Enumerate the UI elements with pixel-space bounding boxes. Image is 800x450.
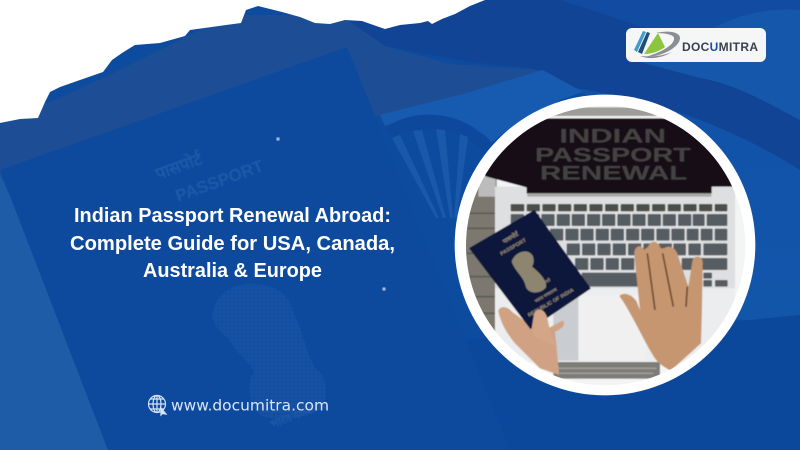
white circle frame bbox=[455, 95, 755, 395]
screen text: PASSPORT bbox=[535, 144, 691, 166]
title bbox=[70, 204, 395, 282]
keyboard bbox=[511, 204, 728, 287]
icon: globe bbox=[148, 396, 166, 415]
background: Ashoka wheel watermark bbox=[386, 115, 492, 218]
passport cover lettering (faint): भारत गणराज्य bbox=[269, 399, 329, 431]
left thumb bbox=[532, 309, 557, 347]
torn white paper edge bbox=[0, 0, 485, 123]
logo mark bbox=[634, 31, 680, 58]
website link bbox=[148, 396, 329, 415]
laptop screen bbox=[473, 118, 740, 197]
laptop body bbox=[495, 187, 748, 362]
handheld passport: PASSPORT bbox=[499, 237, 528, 257]
title: Australia & Europe bbox=[143, 259, 322, 282]
screen text: RENEWAL bbox=[540, 163, 687, 185]
passport cover background bbox=[0, 47, 510, 450]
title: Complete Guide for USA, Canada, bbox=[70, 232, 395, 255]
handheld passport: REPUBLIC OF INDIA bbox=[527, 287, 575, 319]
right hand bbox=[619, 242, 703, 371]
wooden table bbox=[463, 107, 660, 379]
passport cover lettering (faint) bbox=[152, 148, 329, 431]
handheld passport: भारत गणराज्य bbox=[534, 287, 558, 304]
logo badge bbox=[626, 28, 766, 62]
handheld passport: सत्यमेव जयते bbox=[530, 277, 552, 293]
passport cover emblem (faint) bbox=[212, 284, 326, 419]
handheld passport bbox=[470, 211, 590, 328]
handheld passport: पासपोर्ट bbox=[500, 229, 521, 246]
passport cover lettering (faint): पासपोर्ट bbox=[152, 148, 206, 184]
screen text: INDIAN bbox=[559, 126, 666, 148]
logo wordmark: DOCUMITRA bbox=[682, 40, 758, 54]
laptop photo bbox=[463, 103, 750, 390]
website address: www.documitra.com bbox=[171, 396, 329, 414]
photo circle bbox=[455, 95, 755, 395]
title: Indian Passport Renewal Abroad: bbox=[74, 204, 391, 227]
passport cover lettering (faint): PASSPORT bbox=[173, 156, 267, 206]
screen text bbox=[536, 128, 692, 180]
passport emblem bbox=[512, 251, 546, 292]
left hand bbox=[498, 307, 564, 375]
